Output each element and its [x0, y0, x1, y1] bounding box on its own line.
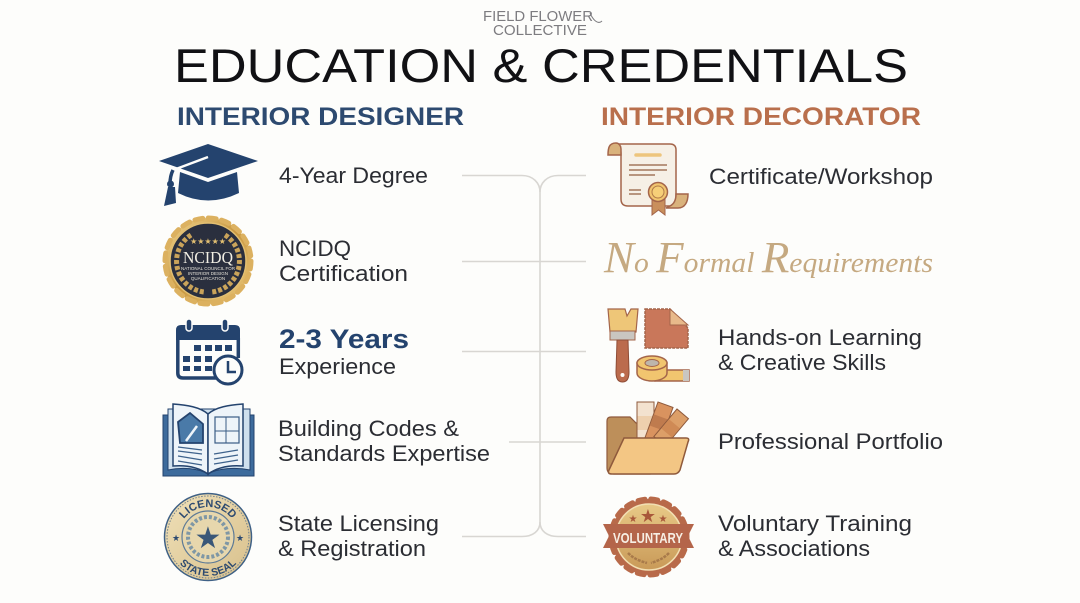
icon: NCIDQ badge: [165, 218, 251, 304]
text: NCIDQ Certification: NCIDQ: [279, 236, 351, 261]
text: Voluntary Training & Associations: Voluntary Training: [718, 511, 912, 536]
heading: Interior Designer: INTERIOR DESIGNER: [177, 103, 464, 131]
text: State Licensing & Registration: [278, 511, 439, 561]
text: Hands-on Learning & Creative Skills: [718, 325, 922, 375]
icon: paint brush, fabric swatch and tape measure: [608, 309, 689, 382]
icon: graduation cap: [159, 144, 258, 206]
text: Certificate/Workshop: Certificate/Workshop: [709, 164, 933, 189]
text: 2-3 Years Experience: 2-3 Years: [279, 324, 409, 354]
script text: No Formal Requirements: No Formal Requirements: [603, 233, 933, 282]
icon: open book with plans: [163, 404, 254, 476]
text: 2-3 Years Experience: [279, 324, 409, 379]
text: Building Codes & Standards Expertise: [278, 416, 490, 466]
text: Voluntary Training & Associations: & Associations: [718, 536, 870, 561]
icon: licensed state seal: ★: [172, 533, 180, 543]
icon: certificate scroll: [608, 143, 688, 215]
heading: Interior Decorator: INTERIOR DECORATOR: [601, 103, 921, 131]
logo: Field Flower Collective: COLLECTIVE: [493, 22, 587, 39]
icon: licensed state seal: STATE SEAL: [180, 560, 236, 576]
icon: voluntary badge: ★: [659, 514, 668, 525]
text: Professional Portfolio: Professional Portfolio: [718, 429, 943, 454]
icon: NCIDQ badge: NCIDQ: [183, 248, 233, 267]
icon: voluntary badge: VOLUNTARY: [613, 530, 683, 547]
text: Hands-on Learning & Creative Skills: Hands-on Learning: [718, 325, 922, 350]
text: Hands-on Learning & Creative Skills: & Creative Skills: [718, 350, 886, 375]
icon: NCIDQ badge: NATIONAL COUNCIL FOR: [181, 266, 236, 271]
icon: voluntary badge: ★: [629, 514, 638, 525]
icon: calendar with clock: [176, 319, 242, 384]
text: 4-Year Degree: 4-Year Degree: [279, 163, 428, 188]
icon: licensed state seal: ★: [195, 522, 221, 555]
title: EDUCATION & CREDENTIALS: [174, 39, 908, 92]
text: NCIDQ Certification: [279, 236, 408, 286]
icon: NCIDQ badge: QUALIFICATION: [191, 276, 225, 281]
text: State Licensing & Registration: & Registration: [278, 536, 426, 561]
icon: folder with colour swatches: [607, 402, 689, 474]
text: NCIDQ Certification: Certification: [279, 261, 408, 286]
icon: voluntary badge: [603, 499, 694, 575]
icon: licensed state seal: LICENSED: [178, 499, 236, 518]
connector lines: [462, 176, 586, 536]
icon: licensed state seal: [164, 492, 252, 582]
icon: voluntary badge: ★: [640, 506, 656, 526]
text: Building Codes & Standards Expertise: Building Codes &: [278, 416, 459, 441]
icon: NCIDQ badge: INTERIOR DESIGN: [188, 271, 228, 276]
text: 2-3 Years Experience: Experience: [279, 354, 396, 379]
text: Building Codes & Standards Expertise: Standards Expertise: [278, 441, 490, 466]
logo: Field Flower Collective: FIELD FLOWER: [483, 8, 593, 25]
icon: licensed state seal: ★: [236, 533, 244, 543]
text: Voluntary Training & Associations: [718, 511, 912, 561]
icon: NCIDQ badge: ★★★★★: [190, 237, 226, 246]
logo: Field Flower Collective: [483, 8, 602, 39]
text: State Licensing & Registration: State Licensing: [278, 511, 439, 536]
